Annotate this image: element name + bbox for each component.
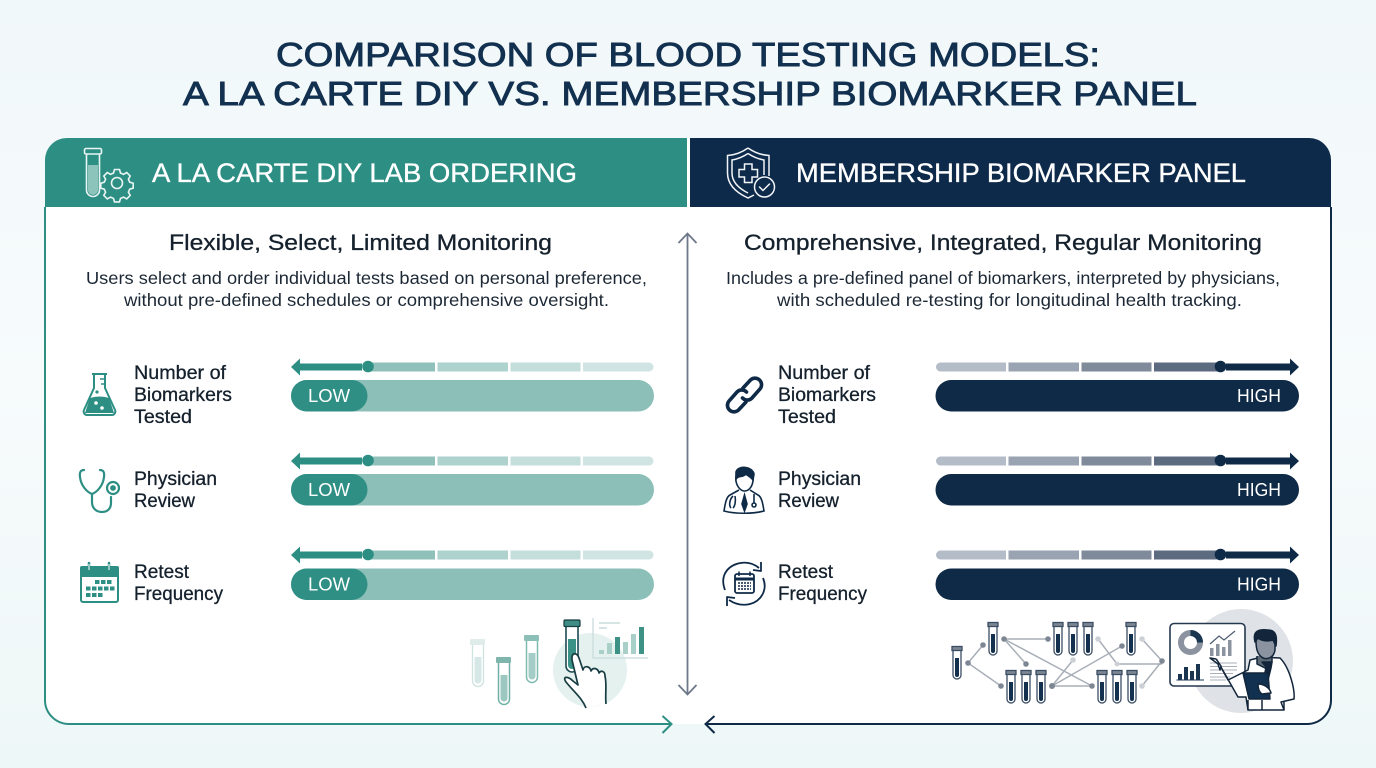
row: biomarkers low [84,358,654,428]
label: physician review [134,469,217,512]
selected test tube [564,620,580,672]
header band: a la carte [45,138,687,207]
border: right outline with arrow [706,207,1331,733]
label: retest frequency [778,562,867,605]
meter: high [936,568,1299,600]
label: number of biomarkers tested: Number of [134,363,227,384]
test tube 3 [524,635,539,682]
label: number of biomarkers tested [134,363,232,428]
icon: calendar with refresh arrows [723,562,765,606]
arrow: vertical double-headed divider [678,234,696,694]
label: physician review: Physician [778,469,861,490]
title: COMPARISON OF BLOOD TESTING MODELS: [276,37,1100,74]
grey backdrop circle [1189,609,1293,713]
label: retest frequency: Frequency [134,584,223,605]
row: physician review low [80,452,654,512]
border: left outline with arrow [45,207,672,733]
label: physician review [778,469,861,512]
meter: high: HIGH [1237,479,1281,500]
label: number of biomarkers tested: Biomarkers [134,385,232,406]
label: retest frequency [134,562,223,605]
icon: shield with cross and check [728,148,774,198]
icon: chain link [727,378,762,412]
row: physician review high [724,452,1299,513]
scale: high arrow [936,546,1299,564]
meter: low: LOW [308,574,351,594]
scale: high arrow [936,452,1299,470]
description: membership [726,268,1280,310]
label: physician review: Review [778,491,839,512]
label: number of biomarkers tested: Tested [778,407,836,428]
label: retest frequency: Frequency [778,584,867,605]
header band: membership [690,138,1331,207]
meter: low [291,380,654,412]
panel: membership biomarker panel [690,138,1331,713]
label: physician review: Review [134,491,195,512]
meter: low: LOW [308,385,351,406]
description: membership: Includes a pre-defined panel of biomarkers, interpreted by physicians, [726,268,1280,288]
label: retest frequency: Retest [134,562,190,583]
scale: low arrow [291,452,654,470]
meter: low [291,568,654,600]
label: physician review: Physician [134,469,217,490]
description: a la carte: without pre-defined schedules or comprehensive oversight. [123,290,609,310]
label: number of biomarkers tested: Biomarkers [778,385,876,406]
header label: membership: MEMBERSHIP BIOMARKER PANEL [796,158,1246,188]
title: A LA CARTE DIY VS. MEMBERSHIP BIOMARKER PANEL [183,76,1197,113]
icon: doctor [724,467,764,513]
label: number of biomarkers tested: Tested [134,407,192,428]
meter: low [291,474,654,506]
icon: test tube and gear [84,148,133,202]
scale: high arrow [936,358,1299,376]
scale: low arrow [291,546,654,564]
row: retest frequency low [80,546,654,605]
test tube 2 [496,657,511,704]
network lines and nodes [965,636,1165,689]
subheading: comprehensive: Comprehensive, Integrated, Regular Monitoring [744,230,1262,255]
panel: comparison card background [45,138,1331,724]
description: a la carte: Users select and order individual tests based on personal preference, [86,268,647,288]
icon: calendar [80,563,119,602]
meter: high [936,474,1299,506]
biomarker test tubes [952,622,1137,703]
icon: flask [84,374,115,415]
hand pointing [565,654,606,708]
meter: high: HIGH [1237,385,1281,406]
scale: low arrow [291,358,654,376]
meter: high [936,380,1299,412]
faded test tube [470,639,485,686]
illustration: test tubes with selecting hand and chart [470,618,648,708]
row: biomarkers high [727,358,1299,428]
small bar chart [593,618,648,658]
meter: low: LOW [308,479,351,500]
subheading: flexible: Flexible, Select, Limited Monitoring [169,230,552,255]
icon: stethoscope [80,470,119,512]
row: retest frequency high [723,546,1299,606]
description: membership: with scheduled re-testing for longitudinal health tracking. [776,290,1242,310]
title [183,37,1197,113]
description: a la carte [86,268,647,310]
dashboard board [1170,624,1245,686]
physician figure [1210,630,1294,710]
meter: high: HIGH [1237,574,1281,594]
header label: a la carte: A LA CARTE DIY LAB ORDERING [152,158,577,188]
illustration: connected biomarker network and physician with dashboard [952,609,1294,713]
label: retest frequency: Retest [778,562,834,583]
label: number of biomarkers tested: Number of [778,363,871,384]
label: number of biomarkers tested [778,363,876,428]
panel: a la carte DIY lab ordering [45,138,687,708]
